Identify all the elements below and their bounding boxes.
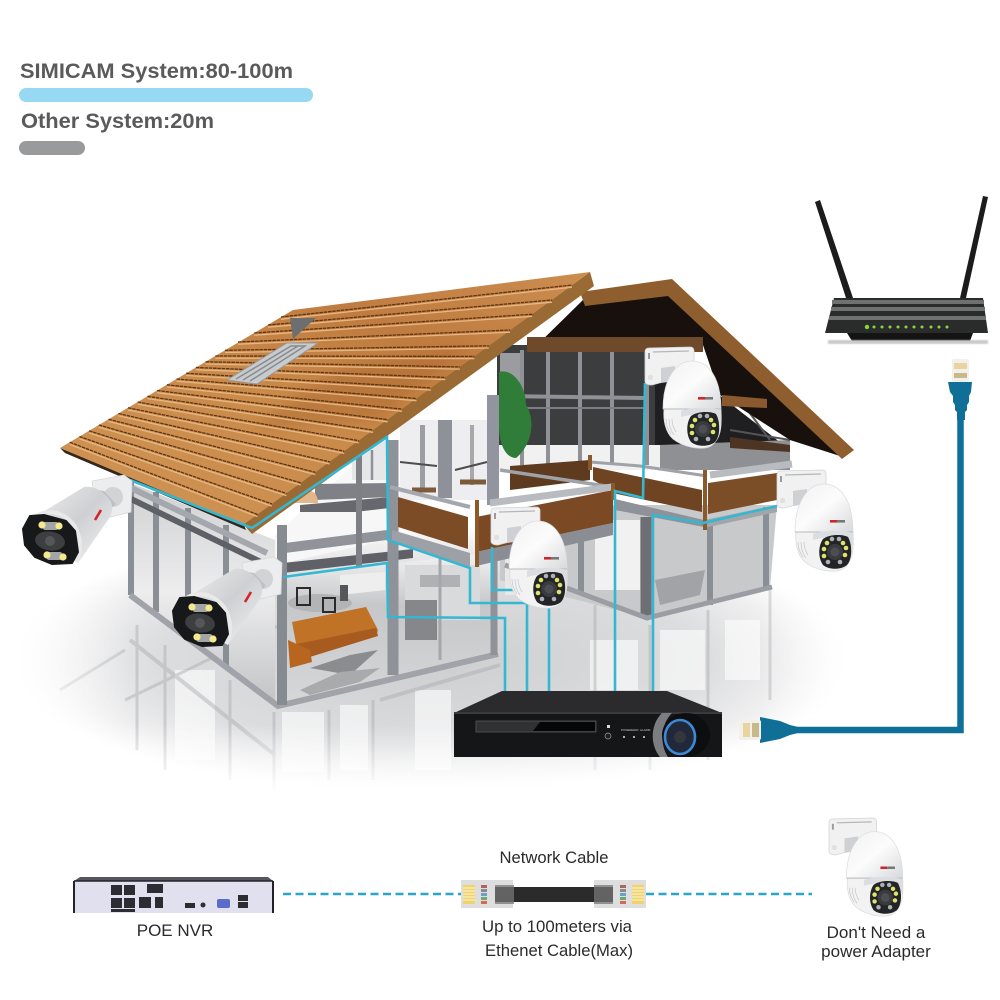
network cable xyxy=(461,880,646,908)
rafters xyxy=(527,337,790,452)
router body xyxy=(825,298,988,333)
network wiring xyxy=(130,383,777,693)
label: no adapter: power Adapter xyxy=(821,942,931,961)
upper floor bay xyxy=(275,435,413,573)
status labels: ALARM xyxy=(640,728,651,732)
label: POE NVR: POE NVR xyxy=(137,921,213,940)
label: no adapter xyxy=(821,923,931,961)
PTZ camera 1 xyxy=(645,347,721,448)
antennas xyxy=(815,200,853,298)
range bar: SIMICAM xyxy=(19,88,313,102)
roof shading xyxy=(250,345,470,430)
connector boot left xyxy=(760,717,798,743)
router xyxy=(815,196,988,344)
left wing frame xyxy=(130,480,498,706)
armchair xyxy=(288,640,312,668)
house xyxy=(60,272,854,706)
dining table xyxy=(288,594,352,612)
roof shadow xyxy=(60,448,246,530)
rear roof edge xyxy=(580,279,854,459)
title: other range: Other System:20m xyxy=(21,110,214,133)
right plug xyxy=(594,880,646,908)
label: cable range xyxy=(482,917,633,960)
connector boot top xyxy=(948,382,972,420)
PTZ camera 2 xyxy=(777,470,853,571)
label: no adapter: Don't Need a xyxy=(827,923,926,942)
right wing glass xyxy=(500,505,777,618)
router shadow xyxy=(828,340,988,344)
left wing glass xyxy=(128,482,275,703)
cable run xyxy=(795,418,960,730)
roof vent xyxy=(290,318,316,339)
lower rooms detail xyxy=(340,520,705,640)
furniture xyxy=(288,585,380,695)
main roof xyxy=(60,272,594,534)
upper central windows xyxy=(400,395,499,505)
bullet camera 2 xyxy=(173,557,282,646)
status labels xyxy=(621,728,651,732)
central frame xyxy=(393,440,494,675)
status LEDs xyxy=(865,325,948,329)
PTZ camera bottom xyxy=(829,818,903,916)
title: SIMICAM range: SIMICAM System:80-100m xyxy=(20,60,293,83)
cable body xyxy=(495,887,613,902)
rear roof underside xyxy=(530,292,840,456)
roof tiles xyxy=(60,272,590,525)
label: network cable: Network Cable xyxy=(500,848,608,867)
lower floor room xyxy=(285,553,497,703)
back windows xyxy=(497,345,790,470)
rug xyxy=(310,650,378,675)
dashed link right xyxy=(646,893,812,895)
NVR recorder xyxy=(454,691,722,757)
sofa xyxy=(292,607,378,654)
connector head left xyxy=(739,720,761,740)
roof fascia xyxy=(243,272,594,534)
floor reflection xyxy=(0,525,1000,800)
left plug xyxy=(461,880,513,908)
right wing frame xyxy=(505,507,772,618)
status labels: POWER xyxy=(621,728,633,732)
range bar: other xyxy=(19,141,85,155)
status labels: HDD xyxy=(632,728,639,732)
tree xyxy=(499,371,531,458)
POE NVR back panel xyxy=(74,877,273,913)
PTZ camera 3 xyxy=(491,507,567,608)
skylight xyxy=(227,343,318,384)
bullet camera 1 xyxy=(23,475,132,564)
dashed link left xyxy=(283,893,461,895)
label: cable range: Ethenet Cable(Max) xyxy=(485,941,633,960)
connector head top xyxy=(952,359,969,382)
balconies xyxy=(390,455,792,568)
ports xyxy=(111,884,248,912)
label: cable range: Up to 100meters via xyxy=(482,917,633,936)
blue ethernet cable xyxy=(739,359,972,743)
